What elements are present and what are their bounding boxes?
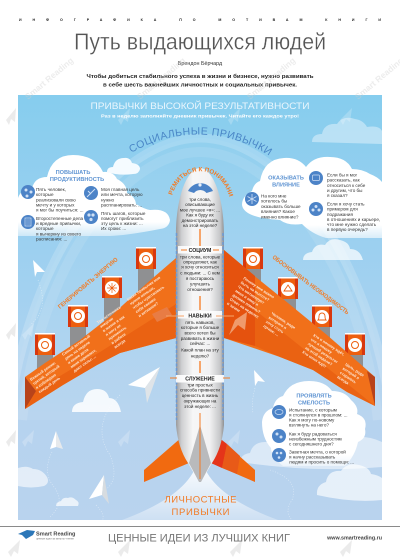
text: role model: подражания	[327, 212, 353, 217]
text: five steps: помогут приблизить	[101, 216, 144, 221]
icon: target	[84, 186, 98, 200]
nose text: три слова,	[189, 197, 211, 202]
wing texts: дают силы: ...	[72, 354, 97, 373]
intro text: в себе шесть важнейших личностных и социальных привычек.	[103, 82, 298, 88]
text: five steps: Их сроки: ...	[101, 226, 126, 231]
plane 2	[128, 367, 160, 403]
wing texts: и активнее?	[137, 300, 160, 318]
icon: smile	[272, 429, 286, 443]
paper planes	[33, 260, 265, 504]
top label: ИНФОГРАФИКА ПО МОТИВАМ КНИГИ	[19, 18, 381, 22]
text: who to inspire: именно влияние?	[261, 214, 299, 220]
footer logo	[18, 530, 76, 540]
label social: СОЦИУМ	[189, 248, 211, 254]
text: if I could tell: рассказать, как	[327, 178, 361, 182]
wing texts: Кто и почему ждёт,	[312, 333, 346, 357]
wing texts: меня и кому я	[234, 288, 259, 307]
text: five people: я мог бы поучиться: ...	[36, 208, 84, 212]
wing texts: и какие дела	[66, 346, 90, 365]
text: main goal: нужно	[101, 198, 114, 202]
service text: ценность в жизнь	[182, 393, 219, 398]
engine 2	[68, 305, 88, 350]
watermarks: Smart Reading	[135, 55, 187, 102]
wing texts: Цель, ради	[344, 362, 366, 378]
nose text: демонстрировать	[182, 218, 219, 223]
engine 3	[102, 276, 122, 321]
wing texts: стараюсь	[339, 370, 358, 385]
text: dream: людям и просить о помощи: ...	[289, 460, 354, 464]
left wing	[25, 257, 176, 409]
intro text: Чтобы добиться стабильного успеха в жизни и бизнесе, нужно развивать	[86, 73, 314, 80]
text: who to inspire: влияния? Какое	[261, 209, 295, 214]
left fin	[144, 437, 189, 482]
text: who to inspire: На кого мне	[261, 194, 287, 198]
text: distractions: я вычеркну из своего	[36, 232, 81, 236]
nose emblem	[188, 183, 213, 193]
wing texts: всегда	[113, 338, 127, 349]
wing texts: Три источника	[96, 304, 122, 325]
icon: people network	[21, 185, 35, 199]
text: five people: реализовали свою	[36, 198, 76, 202]
wing flap	[152, 307, 172, 322]
cloud behind courage	[240, 437, 382, 469]
wing texts: Почему мне важно	[242, 276, 276, 300]
wing texts: которого я	[268, 315, 288, 330]
nose text: Как я буду их	[186, 212, 214, 218]
text: who to inspire: оказывать больше	[261, 204, 301, 209]
title: Путь выдающихся людей	[74, 28, 326, 54]
panel: cloud productivity	[18, 155, 170, 242]
right wing	[224, 250, 375, 406]
footer slogan: ЦЕННЫЕ ИДЕИ ИЗ ЛУЧШИХ КНИГ	[108, 532, 290, 544]
watermarks: Smart Reading	[245, 55, 297, 102]
wing texts: день на неделе	[64, 339, 92, 361]
plane 5	[89, 475, 109, 504]
cloud mid right	[303, 239, 363, 260]
skills text: развивать в жизни	[181, 336, 220, 341]
panel: cloud courage: СМЕЛОСТЬ	[298, 400, 330, 406]
plane 4	[50, 431, 63, 449]
wing texts: я могу их	[104, 322, 123, 337]
wing texts: применять	[107, 325, 128, 341]
wing texts: хочу стать	[265, 319, 285, 335]
text: challenges: Как я могу по-новому	[289, 418, 335, 422]
watermarks	[23, 55, 400, 102]
icon: logo	[18, 530, 35, 539]
social text: я хочу относиться	[181, 264, 219, 270]
skills text: всего хотел бы	[184, 330, 216, 336]
background arcs	[8, 138, 392, 420]
text: challenges: я столкнулся в прошлом: ...	[289, 412, 348, 418]
footer logo: Smart Reading	[36, 532, 76, 538]
label social	[178, 246, 222, 254]
cloud heading: ОКАЗЫВАТЬ	[268, 176, 304, 182]
text: dream: Заветная мечта, о которой	[289, 448, 346, 454]
cloud heading: ПОВЫШАТЬ	[56, 170, 90, 176]
text: five people: которые	[36, 192, 54, 197]
panel subheading: Раз в неделю заполняйте дневник привычек. Читайте его каждое утро!	[101, 114, 299, 118]
wing texts: что я покажу	[310, 337, 334, 355]
footer line	[0, 526, 400, 527]
text: distractions: Второстепенные дела	[36, 216, 84, 221]
text: role model: в первую очередь?	[327, 227, 368, 232]
text: if I could tell: относиться к себе	[327, 183, 366, 188]
wing texts: на этой неделе?	[304, 345, 334, 367]
social text: отношения?	[187, 287, 213, 292]
text: distractions: которые	[36, 226, 54, 231]
footer logo: ценные идеи за минуты чтения	[36, 538, 74, 540]
cloud shape	[242, 157, 382, 238]
personal habits heading: ПРИВЫЧКИ	[172, 507, 230, 518]
text: who to inspire: хотелось бы	[261, 198, 287, 204]
skills text: сейчас: ...	[190, 340, 210, 346]
wing texts: меня заряжают,	[69, 348, 97, 369]
icon: eye	[272, 405, 286, 419]
wing texts: которой я	[342, 366, 360, 380]
text: challenges: взглянуть на него?	[289, 422, 329, 428]
engine 7	[312, 305, 332, 342]
blue dashed stripes	[176, 233, 223, 420]
icon: group	[309, 202, 323, 216]
cloud bottom left	[18, 467, 48, 488]
engine 6	[278, 277, 298, 312]
wing texts	[226, 276, 366, 390]
wing texts: Человек, ради	[270, 311, 297, 330]
text: role model: в отношениях и карьере,	[327, 217, 380, 222]
wing texts: и зачем	[226, 301, 241, 313]
wing texts: Ответ на неделю:	[229, 297, 260, 319]
cloud right	[317, 464, 382, 501]
engine 8	[345, 333, 365, 372]
wing logo mark	[229, 312, 247, 335]
text: main goal: Моя главная цель	[101, 187, 140, 192]
panel: sky background	[18, 95, 382, 520]
social text: с людьми: ... С кем	[180, 270, 220, 276]
label skills: НАВЫКИ	[188, 314, 212, 320]
right fin	[211, 437, 255, 482]
wing texts: себя свежее	[134, 296, 157, 314]
text: five people: Пять человек,	[36, 187, 66, 192]
watermarks: Smart Reading	[23, 55, 75, 102]
text: dream: я начну рассказывать	[289, 454, 336, 460]
text: challenges: Испытание, с которым	[289, 408, 337, 412]
text: main goal: распланировать: ...	[101, 202, 142, 208]
plume	[122, 460, 278, 520]
airplane tail fins	[144, 437, 255, 482]
plane 1	[33, 260, 45, 277]
service text: способа привнести	[180, 388, 220, 392]
text: main goal: или мечта, которую	[101, 192, 143, 197]
cloud top right	[312, 118, 382, 144]
text: joy: с сегодняшнего дня?	[289, 442, 334, 446]
wing shape	[25, 258, 176, 409]
service text: три простых	[187, 382, 214, 388]
nose text: на этой неделе?	[183, 222, 218, 228]
wing texts: Самый активный	[61, 333, 92, 357]
background clouds	[18, 118, 382, 506]
text: five steps: Пять шагов, которые	[101, 211, 146, 216]
panel heading: ПРИВЫЧКИ ВЫСОКОЙ РЕЗУЛЬТАТИВНОСТИ	[90, 100, 310, 111]
service text: этой неделе: ...	[184, 403, 216, 409]
wing texts: нужно меньше,	[129, 285, 156, 306]
wing texts: быть на высоте?	[240, 280, 271, 303]
fuselage body	[176, 168, 224, 482]
right wing engines	[243, 247, 365, 372]
skills text: пять навыков,	[185, 320, 215, 325]
social text: улучшить	[190, 282, 211, 286]
icon: dream	[272, 448, 286, 462]
personal habits heading	[164, 494, 236, 518]
wing texts: Кто меня ждёт	[302, 349, 328, 369]
text: distractions: и вредные привычки,	[36, 221, 81, 226]
panel: cloud courage	[262, 381, 366, 466]
text: distractions: расписания: ...	[36, 236, 67, 242]
wing texts: лучший результат	[307, 341, 339, 364]
wing texts: должен помочь?	[232, 292, 262, 315]
icon: speech	[309, 171, 323, 185]
intro text	[86, 73, 314, 88]
text: five people: мечту и у которых	[36, 202, 75, 208]
text: if I could tell: Если бы я мог	[327, 172, 358, 178]
skills text: которые я больше	[181, 325, 220, 330]
watermark logos outside panel	[6, 108, 352, 557]
author: Брендон Бёрчард	[178, 61, 223, 67]
text: role model: Если я хочу стать	[327, 202, 365, 206]
label service	[170, 375, 230, 382]
social text: я постараюсь	[186, 276, 215, 281]
wing tip fold	[367, 371, 375, 406]
watermark logos inside panel	[22, 108, 352, 447]
social text: три слова, которые	[180, 254, 221, 260]
wing texts: всегда	[336, 374, 350, 386]
text: joy: неизбежным трудностям	[289, 436, 342, 442]
dotted trails	[30, 280, 294, 521]
wing texts: Каких привычек мне	[126, 274, 162, 302]
cloud shape	[262, 381, 366, 466]
engine 1	[35, 333, 55, 372]
nose text: мое лучшее «я»: ...	[180, 208, 220, 212]
panel: cloud productivity: ПРОДУКТИВНОСТЬ	[50, 177, 104, 183]
text: if I could tell: и другим, что бы	[327, 188, 362, 193]
skills text: Какой план на эту	[181, 346, 219, 352]
social text: определяют, как	[183, 260, 217, 264]
cloud lower left	[72, 389, 121, 412]
wing texts: энергии	[99, 316, 115, 329]
text: five steps: эту цель к жизни: ...	[101, 221, 143, 226]
wing tip fold	[25, 377, 36, 409]
wing shape	[224, 250, 375, 406]
wing texts: Что мотивирует	[237, 284, 266, 305]
engine 4	[136, 247, 156, 292]
left wing engines	[35, 247, 156, 372]
icon: snowflake	[245, 192, 259, 206]
wing heading: necessity: ОБОСНОВЫВАТЬ НЕОБХОДИМОСТЬ	[271, 255, 350, 317]
skills text: неделю?	[191, 354, 210, 358]
small white cloud	[107, 158, 140, 175]
text: joy: Как я буду радоваться	[289, 432, 337, 436]
orange spine	[200, 413, 201, 479]
service text: окружающих на	[184, 398, 217, 404]
wing texts: в работе	[110, 331, 127, 345]
nose text: описывающие	[185, 202, 215, 207]
text: role model: что мне нужно сделать	[327, 222, 377, 227]
wing texts: Важный режим:	[29, 360, 57, 382]
wing heading: energy: ГЕНЕРИРОВАТЬ ЭНЕРГИЮ	[57, 257, 120, 311]
panel: cloud influence: ВЛИЯНИЕ	[272, 182, 300, 188]
wing texts: в жизни и как	[101, 314, 126, 333]
footer url: www.smartreading.ru	[326, 536, 382, 542]
social habits arc title: СОЦИАЛЬНЫЕ ПРИВЫЧКИ	[130, 127, 272, 156]
wing texts: чтобы чувствовать	[131, 284, 166, 310]
cloud heading: ПРОЯВЛЯТЬ	[296, 394, 332, 400]
fuselage	[166, 168, 234, 482]
label service: СЛУЖЕНИЕ	[185, 376, 215, 382]
wing texts	[29, 274, 173, 394]
label skills	[166, 311, 234, 320]
wing texts: третий, который	[32, 363, 61, 386]
panel: cloud influence	[242, 157, 382, 238]
plane 3	[254, 370, 265, 386]
personal habits heading: ЛИЧНОСТНЫЕ	[164, 494, 236, 506]
wing texts: каждый день	[37, 375, 62, 394]
icon: checklist	[21, 215, 35, 229]
orange stripes	[199, 229, 201, 373]
icon: flowers	[84, 210, 98, 224]
text: if I could tell: я сказал?	[327, 193, 348, 198]
engine 5	[243, 247, 263, 288]
cloud shape	[18, 155, 170, 236]
wing texts: лучше: ...	[262, 323, 280, 337]
cloud bottom small	[56, 497, 79, 506]
text: role model: примером для	[327, 206, 358, 212]
wing texts: я соблюдаю	[34, 372, 57, 390]
